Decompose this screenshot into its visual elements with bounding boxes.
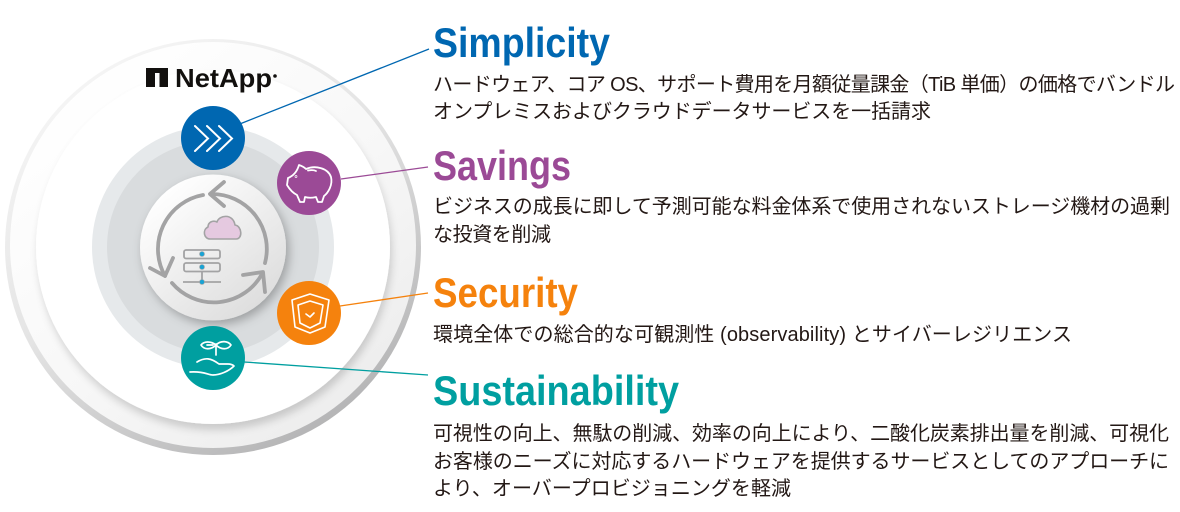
text: sustainability description: お客様のニーズに対応するハードウェアを提供するサービスとしてのアプローチに	[433, 450, 1169, 473]
text: savings description: ビジネスの成長に即して予測可能な料金体系で使用されないストレージ機材の過剰	[433, 195, 1170, 218]
text: security description: 環境全体での総合的な可観測性 (observability) とサイバーレジリエンス	[433, 323, 1072, 346]
connector: simplicity	[241, 49, 429, 124]
connector: security	[340, 293, 428, 306]
text: simplicity description: ハードウェア、コア OS、サポート費用を月額従量課金（TiB 単価）の価格でバンドル	[433, 73, 1175, 96]
text: simplicity description: オンプレミスおよびクラウドデータサービスを一括請求	[433, 100, 931, 123]
icon: server stack	[183, 250, 221, 284]
concentric ring backdrop	[5, 39, 421, 455]
icon: cloud	[204, 216, 241, 239]
section: sustainability	[433, 367, 1169, 500]
connector: sustainability	[244, 362, 428, 375]
section: security	[433, 269, 1072, 346]
connector: savings	[341, 167, 428, 179]
heading: simplicity: Simplicity	[433, 19, 611, 66]
icon: simplicity chevrons	[181, 106, 245, 170]
icon: security shield	[277, 281, 341, 345]
section: savings	[433, 142, 1170, 246]
heading: security: Security	[433, 269, 579, 316]
NetApp logo: NetApp	[175, 63, 272, 93]
icon: savings piggy bank	[277, 151, 341, 215]
text: simplicity description	[433, 73, 1175, 123]
icon: cycle arrows	[150, 182, 267, 302]
text: sustainability description	[433, 422, 1169, 500]
text: savings description	[433, 195, 1170, 246]
text: sustainability description: より、オーバープロビジョニングを軽減	[433, 477, 791, 500]
icon: sustainability hand and sprout	[181, 326, 245, 390]
text: savings description: な投資を削減	[433, 223, 551, 246]
heading: sustainability: Sustainability	[433, 367, 680, 414]
text: sustainability description: 可視性の向上、無駄の削減、効率の向上により、二酸化炭素排出量を削減、可視化	[433, 422, 1169, 445]
heading: savings: Savings	[433, 142, 571, 189]
section: simplicity	[433, 19, 1175, 123]
central cycle icon	[140, 174, 286, 320]
